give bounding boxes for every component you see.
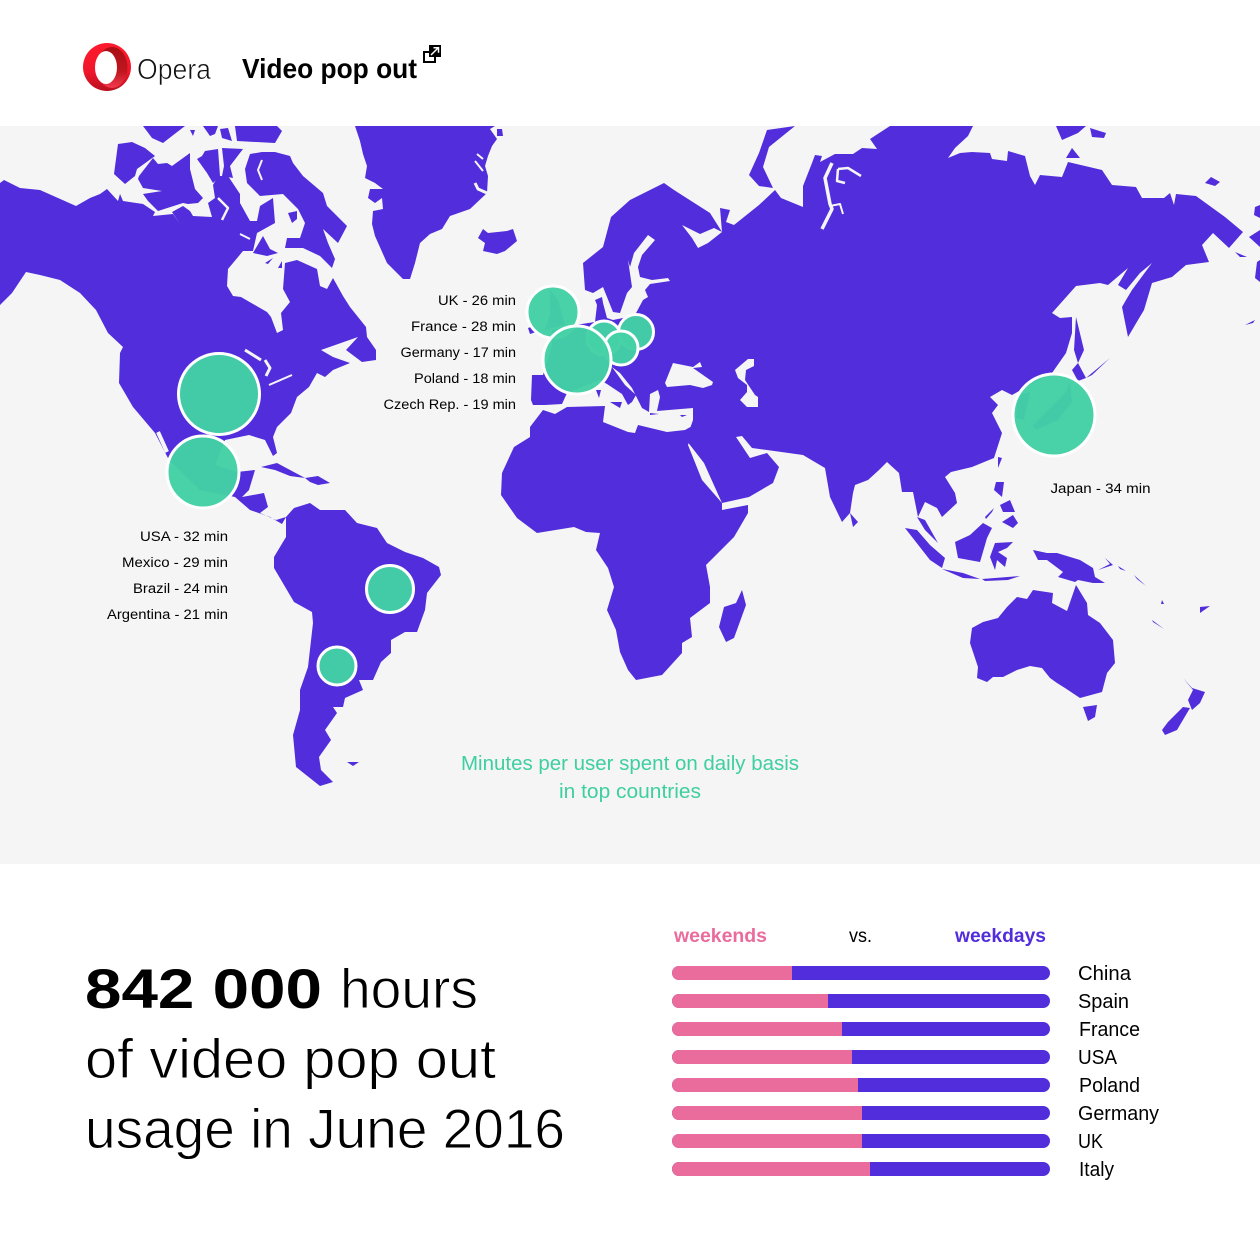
labels: Americas: USA - 32 min: [140, 529, 228, 544]
Korea: [1016, 392, 1030, 420]
bar: Poland: [672, 1075, 1140, 1097]
bar: China: China: [1078, 963, 1132, 985]
labels: Americas: Argentina - 21 min: [107, 607, 228, 622]
labels: Europe: UK - 26 min: [438, 293, 516, 308]
bubble: Japan: [1013, 374, 1095, 456]
headline statistic: of video pop out: [85, 1027, 496, 1090]
bubble: France: [543, 326, 611, 394]
labels: Europe: Czech Rep. - 19 min: [384, 397, 516, 412]
labels: Europe: France - 28 min: [411, 319, 516, 334]
labels: Americas: Brazil - 24 min: [133, 581, 228, 596]
label: Japan: Japan - 34 min: [1050, 481, 1150, 496]
bar: Poland: Poland: [1079, 1075, 1140, 1097]
map caption: in top countries: [559, 781, 701, 803]
South America: [274, 503, 441, 786]
Eurasia: [531, 126, 1243, 522]
headline statistic: hours: [340, 957, 478, 1020]
Greenland: [355, 126, 497, 279]
map caption: [461, 753, 799, 803]
labels: Americas: Mexico - 29 min: [122, 555, 228, 570]
Australia: [970, 585, 1115, 698]
bar: USA: [672, 1047, 1118, 1069]
Canadian Arctic islands: [114, 142, 155, 184]
bubble: UK: [527, 286, 579, 338]
bubble: Argentina: [318, 647, 356, 685]
labels: Americas: [107, 529, 228, 622]
Falkland Islands: [347, 762, 359, 766]
bar: USA: USA: [1078, 1047, 1118, 1069]
bar: UK: UK: [1078, 1131, 1104, 1153]
labels: Europe: [384, 293, 516, 412]
map caption: Minutes per user spent on daily basis: [461, 753, 799, 775]
chart legend: [673, 926, 1046, 947]
labels: Europe: Poland - 18 min: [414, 371, 516, 386]
bubble: Germany: [587, 321, 621, 355]
inland seas and channels: [158, 154, 861, 452]
bubble: USA: [178, 354, 260, 434]
Sakhalin and Hokkaido: [1074, 317, 1084, 363]
Italy islands and Mediterranean islands: [610, 402, 622, 408]
New Zealand: [1183, 678, 1205, 710]
bar: Germany: [672, 1103, 1159, 1125]
Africa: [501, 406, 748, 680]
bubble: Mexico: [167, 436, 239, 508]
heading: Video pop out: Video pop out: [242, 53, 417, 84]
header: logo and title: [83, 43, 441, 91]
panel: world map: [0, 126, 1260, 864]
headline statistic: 842 000: [85, 957, 322, 1020]
bar: Spain: Spain: [1078, 991, 1129, 1013]
headline statistic: usage in June 2016: [85, 1097, 565, 1160]
Tasmania: [1083, 705, 1097, 721]
bubbles: minutes per user by country: [167, 286, 1095, 685]
chart legend: vs.: [849, 926, 872, 947]
Madagascar: [719, 590, 746, 642]
Arctic Russian islands: [1056, 126, 1086, 140]
labels: Europe: Germany - 17 min: [400, 345, 516, 360]
Japan: [1032, 382, 1072, 430]
bar chart: weekends vs weekdays: [672, 926, 1159, 1181]
Caribbean islands: [261, 463, 305, 478]
UK and Ireland: [545, 290, 565, 330]
chart legend: weekends: [673, 926, 767, 947]
bar: Germany: Germany: [1078, 1103, 1159, 1125]
bubble: Brazil: [366, 566, 414, 612]
headline statistic: [85, 957, 565, 1160]
icon: Opera logo: [83, 43, 131, 91]
bar: Italy: Italy: [1079, 1159, 1114, 1181]
Southeast Asia islands: [1033, 550, 1105, 583]
wordmark: Opera: Opera: [137, 54, 212, 86]
bar: France: [672, 1019, 1140, 1041]
Iceland: [478, 229, 517, 254]
chart legend: weekdays: [954, 926, 1046, 947]
bubble: Czech Republic: [604, 331, 638, 365]
bar: Italy: [672, 1159, 1114, 1181]
world map land masses: [0, 126, 1260, 786]
bar: France: France: [1079, 1019, 1140, 1041]
icon: pop out: [424, 45, 441, 62]
bubble: Poland: [618, 314, 654, 350]
Novaya Zemlya: [749, 126, 795, 188]
bar: Spain: [672, 991, 1129, 1013]
bar: UK: [672, 1131, 1104, 1153]
bar: China: [672, 963, 1132, 985]
North America: [0, 176, 376, 524]
